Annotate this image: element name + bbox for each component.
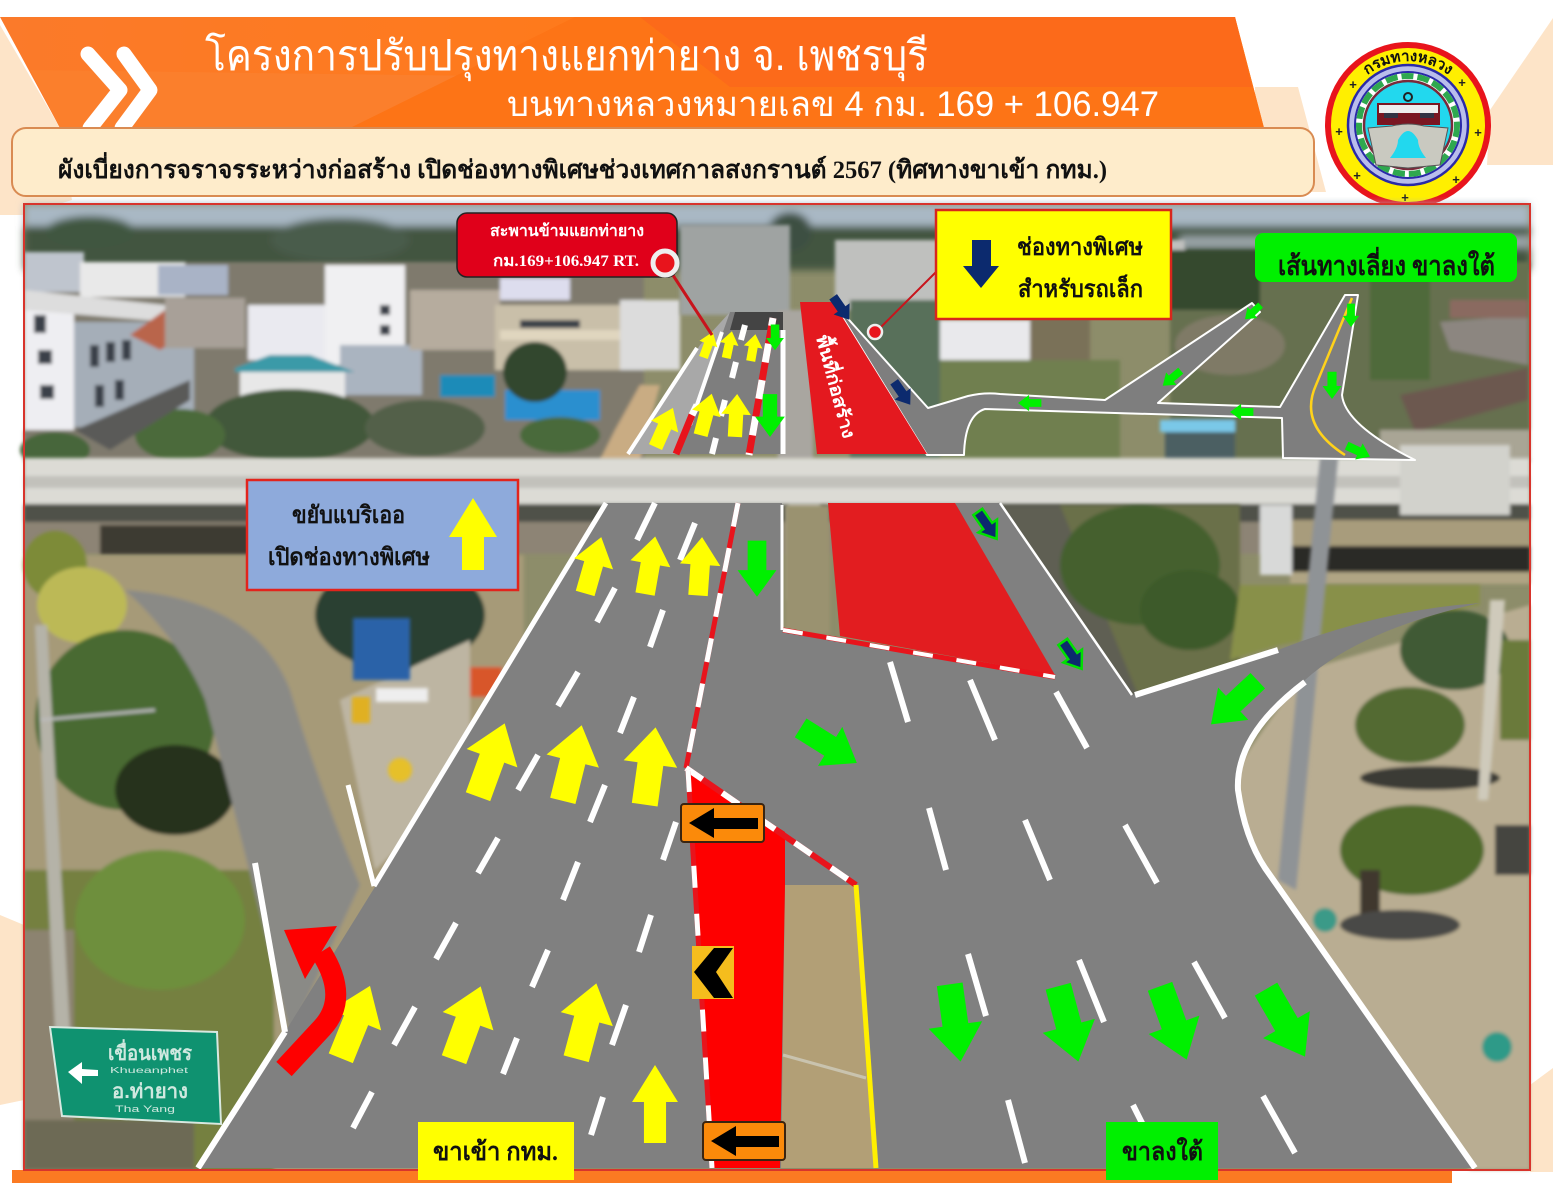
barrier lines (686, 503, 1055, 1168)
callout: special lane for small vehicles (868, 210, 1171, 339)
green highway sign: Tha Yang (115, 1104, 175, 1114)
icon: department of highways logo: + (1452, 172, 1460, 187)
icon: department of highways logo: + (1335, 124, 1343, 139)
title: โครงการปรับปรุงทางแยกท่ายาง จ. เพชรบุรี (205, 31, 928, 82)
icon: department of highways logo: กรมทางหลวง (1364, 52, 1452, 74)
photo: lower right and center areas (785, 505, 1530, 1170)
icon: blue direction sign (352, 618, 428, 782)
yellow edge line (856, 885, 876, 1168)
label: southbound bypass route (1255, 233, 1517, 282)
callout: special lane for small vehicles: สำหรับรถเล็ก (1018, 274, 1143, 303)
green highway sign (50, 1027, 221, 1124)
photo: left town buildings (20, 252, 680, 468)
subtitle: บนทางหลวงหมายเลข 4 กม. 169 + 106.947 (507, 85, 1159, 124)
photo: sky and distant trees (24, 204, 1530, 270)
photo: right town and trees (680, 225, 1530, 462)
legend: barrier shift opens special lane (247, 480, 518, 590)
upper road section: left carriageway (628, 312, 783, 455)
navy small-car arrows (825, 291, 1091, 675)
green highway sign: เขื่อนเพชร (108, 1038, 192, 1065)
red work zone: lower (828, 503, 1055, 675)
icon: department of highways logo: + (1353, 168, 1361, 183)
icon: department of highways logo: + (1349, 77, 1357, 92)
photo: lower left roadside (23, 531, 524, 1170)
label: southbound bypass route: เส้นทางเลี่ยง ขาลงใต้ (1278, 246, 1495, 281)
callout: bridge location (457, 213, 712, 335)
label: southbound (1106, 1122, 1218, 1180)
callout: special lane for small vehicles: ช่องทางพิเศษ (1017, 235, 1143, 261)
median path strip (783, 1055, 866, 1078)
heading bar (12, 128, 1314, 196)
icon: department of highways logo: + (1474, 125, 1482, 140)
pole on right (1278, 458, 1338, 890)
legend: barrier shift opens special lane: ขยับแบริเออ (292, 503, 405, 529)
sign: orange left arrow top (681, 804, 764, 842)
yellow centre line (1311, 298, 1352, 455)
panel: photo background (20, 204, 1530, 1170)
label: inbound Bangkok (418, 1122, 574, 1180)
red work zone: upper (800, 302, 927, 454)
header banner (0, 17, 1264, 128)
label: southbound: ขาลงใต้ (1122, 1136, 1203, 1166)
bottom orange strip (12, 204, 1530, 1183)
label: inbound Bangkok: ขาเข้า กทม. (433, 1138, 558, 1166)
green direction arrows (738, 300, 1374, 1070)
callout: bridge location: กม.169+106.947 RT. (493, 253, 639, 270)
green highway sign: อ.ท่ายาง (112, 1081, 188, 1103)
photo: overpass bridge (24, 445, 1530, 600)
callout: bridge location: สะพานข้ามแยกท่ายาง (490, 222, 644, 240)
median strip (781, 885, 876, 1168)
icon: department of highways logo: + (1401, 190, 1409, 205)
upper road section: side lane and bypass (833, 295, 1415, 460)
green highway sign: Khueanphet (110, 1066, 189, 1075)
work zone label: พื้นที่ก่อสร้าง (812, 332, 863, 440)
sign: chevron (692, 946, 734, 999)
yellow direction arrows (316, 329, 765, 1143)
legend: barrier shift opens special lane: เปิดช่องทางพิเศษ (268, 545, 430, 571)
red closed lane (686, 768, 785, 1168)
lane markings (353, 503, 1295, 1163)
sign: orange left arrow bottom (703, 1122, 785, 1160)
arrow: red U-turn (284, 926, 337, 1069)
icon: department of highways logo: + (1458, 75, 1466, 90)
heading bar: ผังเบี่ยงการจราจรระหว่างก่อสร้าง เปิดช่องทางพิเศษช่วงเทศกาลสงกรานต์ 2567 (ทิศทางขาเข้า กทม.) (58, 152, 1107, 184)
main road surface (196, 503, 1480, 1168)
road edge lines (198, 503, 1475, 1168)
icon: department of highways logo (1325, 42, 1491, 205)
icon: double chevron (88, 54, 150, 128)
